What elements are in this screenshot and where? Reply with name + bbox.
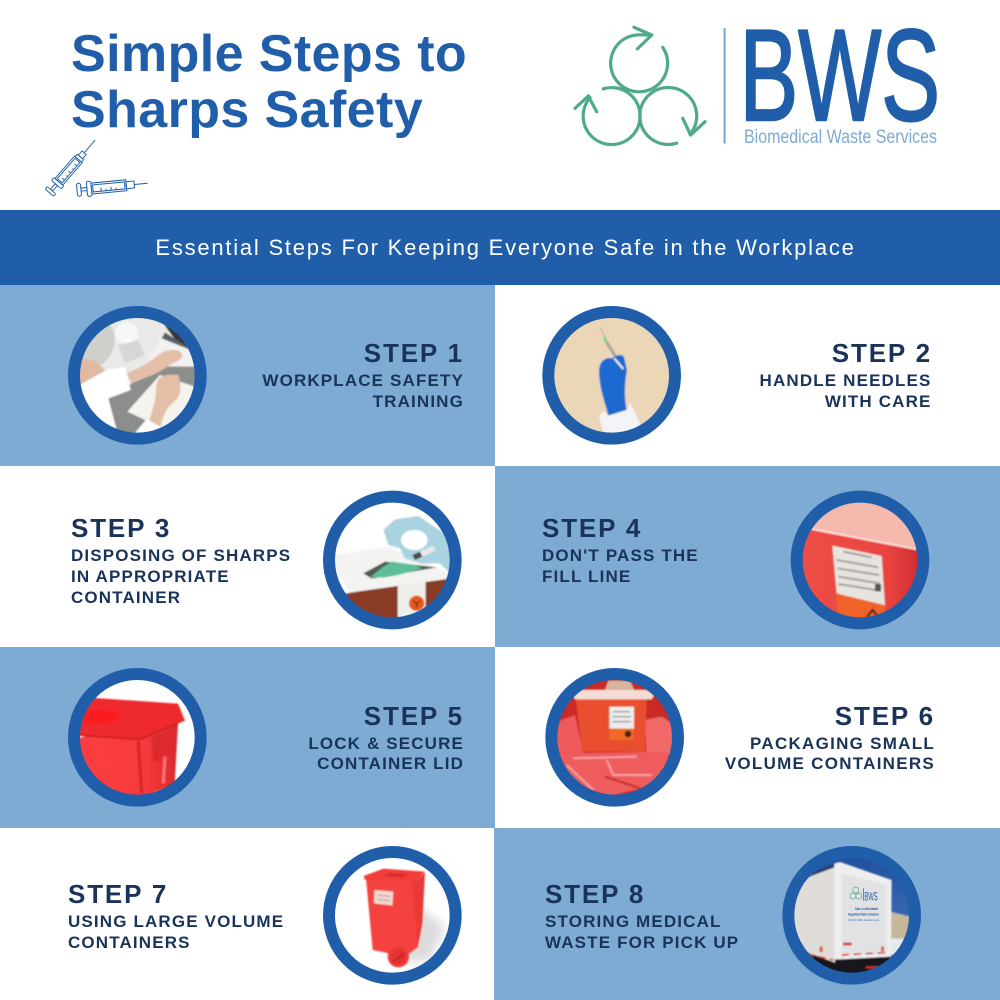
logo tagline: Biomedical Waste Services — [744, 127, 937, 148]
photo: red container lid — [73, 673, 203, 801]
step 5 description: CONTAINER LID — [317, 754, 464, 773]
panel: step 2 — [542, 306, 930, 445]
panel: step 7 — [68, 846, 462, 985]
photo: sharps container with gloved hand — [328, 497, 458, 623]
step 2 description: HANDLE NEEDLES — [760, 371, 932, 390]
panel: step 5 — [0, 647, 495, 828]
step 5 description: LOCK & SECURE — [308, 734, 464, 753]
photo: BWS truck: BWS — [864, 890, 878, 904]
ring — [74, 674, 201, 801]
photo: woman at laptop — [73, 312, 203, 439]
step 4 description: DON'T PASS THE — [542, 546, 699, 565]
ring — [329, 497, 456, 623]
banner — [0, 210, 1000, 285]
panel: step 6 — [545, 668, 934, 807]
ring — [548, 312, 675, 439]
banner text: Essential Steps For Keeping Everyone Safe in the Workplace — [155, 235, 856, 260]
photo: BWS truck: (410) 527-0000 · bwsboston.com — [848, 918, 879, 922]
step 2 description: WITH CARE — [825, 392, 932, 411]
photo: gloved hand holding syringe — [548, 312, 678, 439]
ring — [329, 852, 456, 979]
step 3 description: CONTAINER — [71, 588, 181, 607]
step 4 description: FILL LINE — [542, 567, 631, 586]
title: Sharps Safety — [71, 81, 423, 139]
step 1 description: WORKPLACE SAFETY — [262, 371, 464, 390]
icon: angled syringe — [44, 136, 100, 197]
step 6 description: PACKAGING SMALL — [750, 734, 935, 753]
panel: step 8 — [494, 828, 1000, 1000]
icon: two syringes — [44, 136, 148, 197]
ring — [74, 312, 201, 439]
step 8 description: STORING MEDICAL — [545, 912, 722, 931]
photo: BWS truck: Safe & Affordable — [855, 907, 878, 911]
step 3 heading: STEP 3 — [71, 513, 171, 543]
title: Simple Steps to — [71, 25, 467, 83]
panel: step 4 — [495, 466, 1000, 647]
logo: BWS — [575, 2, 940, 148]
step 7 heading: STEP 7 — [68, 879, 168, 909]
icon: horizontal syringe — [76, 176, 148, 197]
photo: BWS truck — [788, 850, 918, 980]
step 6 description: VOLUME CONTAINERS — [725, 754, 935, 773]
ring — [788, 852, 915, 979]
step 4 heading: STEP 4 — [542, 513, 642, 543]
step 7 description: USING LARGE VOLUME — [68, 912, 284, 931]
step 1 description: TRAINING — [373, 392, 464, 411]
photo: container in red bag — [550, 673, 680, 803]
icon: three recycling circular arrows — [575, 27, 705, 145]
photo: large red bin — [328, 850, 458, 980]
step 8 heading: STEP 8 — [545, 879, 645, 909]
step 5 heading: STEP 5 — [364, 701, 464, 731]
ring — [551, 674, 678, 801]
step 3 description: DISPOSING OF SHARPS — [71, 546, 291, 565]
ring — [797, 497, 923, 623]
step 6 heading: STEP 6 — [835, 701, 935, 731]
photo: BWS truck: Regulated Waste Solutions — [848, 913, 879, 917]
step 1 heading: STEP 1 — [364, 338, 464, 368]
step 3 description: IN APPROPRIATE — [71, 567, 230, 586]
step 7 description: CONTAINERS — [68, 933, 191, 952]
panel: step 3 — [72, 490, 462, 630]
photo: container fill line label — [797, 497, 928, 623]
panel: step 1 — [0, 285, 495, 466]
step 8 description: WASTE FOR PICK UP — [545, 933, 739, 952]
step 2 heading: STEP 2 — [832, 338, 932, 368]
